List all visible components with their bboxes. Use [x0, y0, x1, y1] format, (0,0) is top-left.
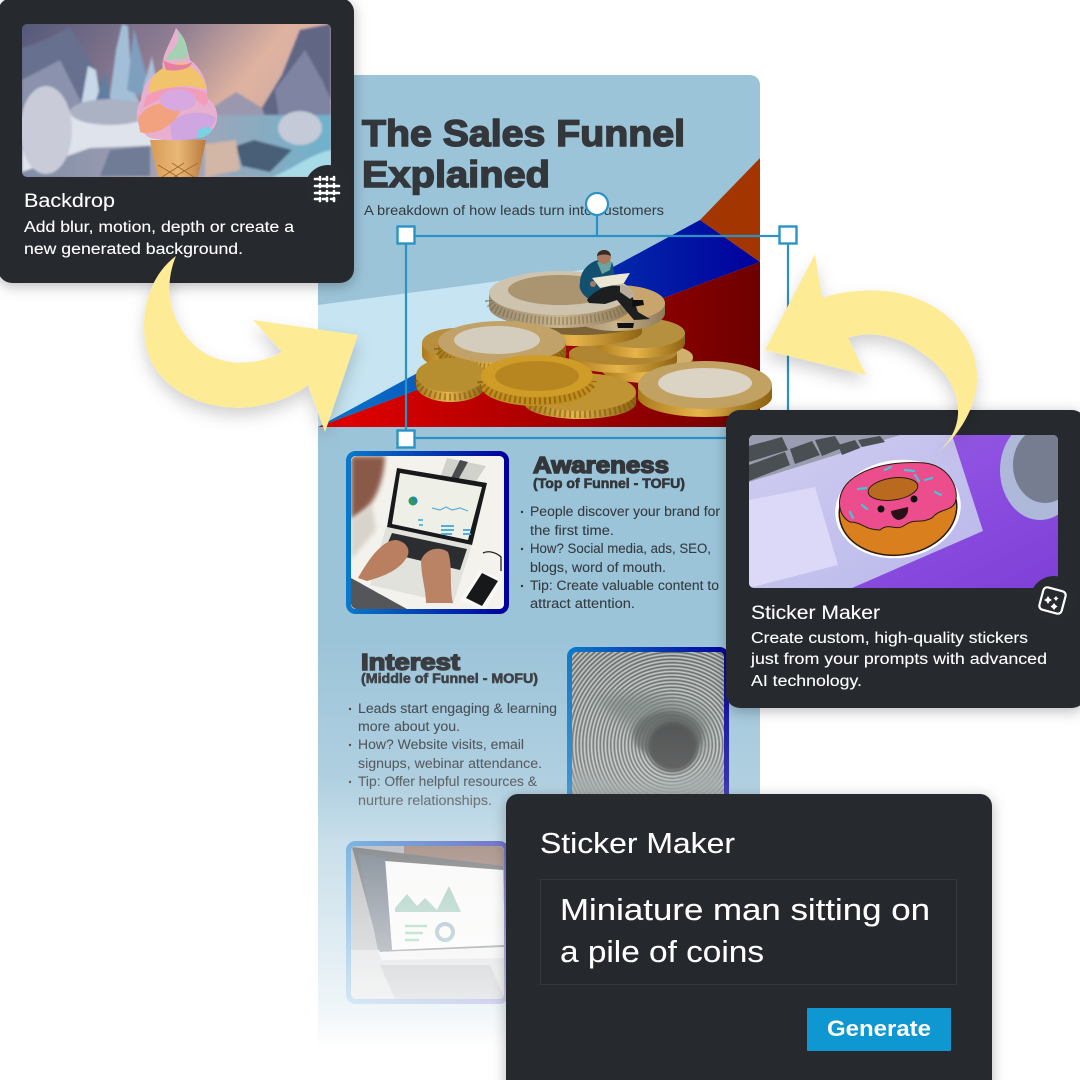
section: awareness bullets: How? Social media, ads, SEO,	[530, 541, 711, 556]
section: awareness bullets: attract attention.	[530, 596, 635, 611]
backdrop description	[24, 219, 294, 258]
ice cream cone	[137, 28, 217, 178]
generate button: Generate	[827, 1016, 931, 1041]
panel: sticker maker card	[726, 410, 1080, 708]
sticker maker description: AI technology.	[751, 673, 862, 690]
prompt text field	[540, 880, 956, 984]
section: awareness heading: (Top of Funnel - TOFU)	[533, 476, 685, 491]
section: awareness bullets: the first time.	[530, 523, 614, 538]
top silver coin	[489, 271, 631, 328]
title: The Sales Funnel	[362, 113, 685, 154]
selection frame with handles	[398, 193, 796, 448]
sticker maker description: just from your prompts with advanced	[750, 651, 1047, 668]
section: awareness bullets: Tip: Create valuable content to	[530, 578, 719, 593]
front silver coin	[638, 361, 772, 417]
title	[362, 113, 685, 195]
title: Explained	[362, 154, 550, 195]
icon: coin pile	[416, 271, 772, 419]
section: interest heading	[361, 649, 538, 686]
subtitle: A breakdown of how leads turn into customers	[364, 203, 664, 218]
generate button	[807, 1008, 951, 1051]
section: interest bullets: more about you.	[358, 719, 460, 734]
section: awareness heading	[533, 452, 685, 491]
icon: backdrop grid	[315, 177, 339, 201]
sticker image: donut on laptop	[749, 435, 1058, 588]
section: interest bullets: How? Website visits, email	[358, 737, 524, 752]
backdrop description: Add blur, motion, depth or create a	[24, 219, 294, 236]
section: awareness bullets: People discover your brand for	[530, 504, 721, 519]
panel: backdrop card	[0, 0, 354, 283]
section: awareness heading: Awareness	[533, 452, 669, 478]
section: interest heading: (Middle of Funnel - MOFU)	[361, 671, 538, 686]
section: awareness bullets: blogs, word of mouth.	[530, 560, 666, 575]
hero image: man on coins	[416, 250, 772, 419]
backdrop description: new generated background.	[24, 241, 243, 258]
header background shapes	[318, 158, 760, 427]
arrow: from backdrop card to poster	[144, 256, 358, 432]
sticker maker description	[750, 630, 1047, 690]
backdrop title: Backdrop	[24, 191, 115, 212]
backdrop image: ice cream in icy landscape	[20, 24, 331, 178]
donut sticker	[835, 460, 961, 558]
arrow: from sticker card to coins	[765, 254, 977, 452]
section: interest bullets: nurture relationships.	[358, 793, 492, 808]
section: interest funnel photo	[567, 647, 729, 794]
icon notch	[305, 165, 351, 211]
section: interest bullets: Tip: Offer helpful resources &	[358, 774, 537, 789]
section: interest heading: Interest	[361, 649, 460, 675]
panel: sales funnel poster	[318, 75, 760, 1065]
prompt card title: Sticker Maker	[540, 828, 735, 860]
section: interest bullets	[349, 701, 557, 808]
panel: prompt card	[506, 794, 992, 1080]
sticker maker title: Sticker Maker	[751, 603, 881, 624]
back right coins	[518, 285, 693, 383]
front gold coins	[481, 355, 636, 419]
section: third laptop photo	[348, 844, 506, 1002]
section: interest bullets: Leads start engaging & learning	[358, 701, 557, 716]
prompt text field: Miniature man sitting on	[560, 892, 930, 927]
left coins	[416, 321, 566, 402]
icon: sticker dice	[1038, 586, 1067, 615]
section: awareness photo	[348, 454, 506, 612]
icon: miniature man	[580, 250, 650, 328]
sticker maker description: Create custom, high-quality stickers	[751, 630, 1028, 647]
prompt text field: a pile of coins	[560, 934, 764, 969]
bottom fade overlay	[318, 640, 760, 1065]
section: awareness bullets	[521, 504, 721, 611]
icon notch	[1030, 576, 1078, 624]
section: interest bullets: signups, webinar attendance.	[358, 756, 542, 771]
